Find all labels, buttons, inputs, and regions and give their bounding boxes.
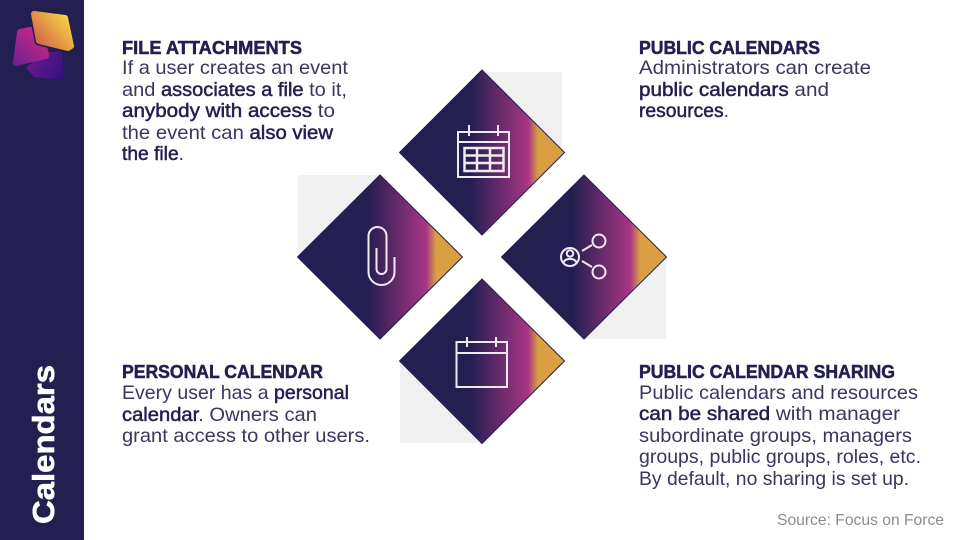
logo <box>16 14 71 78</box>
text block: public calendar sharing: Public calendars and resources <box>639 382 918 404</box>
diamond: file attachments <box>298 175 462 339</box>
decorative square: right <box>584 257 666 339</box>
text block: public calendar sharing: By default, no sharing is set up. <box>639 468 909 490</box>
text block: file attachments: If a user creates an event <box>122 57 349 79</box>
text block: public calendars <box>639 38 871 122</box>
text block: public calendar sharing <box>639 362 921 490</box>
sidebar title: Calendars <box>26 365 61 524</box>
diamond: public calendar sharing <box>502 175 666 339</box>
text block: file attachments: and associates a file to it, <box>122 79 347 101</box>
decorative square: top <box>482 72 562 153</box>
text block: personal calendar <box>122 362 370 447</box>
text block: file attachments: the file. <box>122 143 184 165</box>
source note: Source: Focus on Force <box>777 512 944 529</box>
text block: personal calendar: calendar. Owners can <box>122 404 317 426</box>
diamond: personal calendar <box>400 279 564 444</box>
sidebar <box>0 0 84 540</box>
text block: file attachments: FILE ATTACHMENTS <box>122 38 302 58</box>
text block: public calendar sharing: groups, public groups, roles, etc. <box>639 446 921 468</box>
icon: blank calendar <box>456 337 507 387</box>
text block: public calendars: Administrators can create <box>639 57 871 79</box>
text block: personal calendar: grant access to other users. <box>122 425 370 447</box>
icon: paperclip <box>368 227 394 285</box>
text block: file attachments <box>122 38 349 165</box>
decorative square: bottom <box>400 361 482 443</box>
text block: file attachments: anybody with access to <box>122 100 335 122</box>
text block: public calendars: resources. <box>639 100 729 122</box>
text block: public calendars: PUBLIC CALENDARS <box>639 38 820 58</box>
decorative square: left <box>298 175 380 257</box>
icon: calendar with table <box>458 125 509 177</box>
text block: public calendars: public calendars and <box>639 79 829 101</box>
text block: personal calendar: Every user has a personal <box>122 382 349 404</box>
icon: shared user <box>561 234 606 278</box>
text block: public calendar sharing: can be shared with manager <box>639 403 901 425</box>
text block: file attachments: the event can also view <box>122 122 334 144</box>
text block: personal calendar: PERSONAL CALENDAR <box>122 362 323 382</box>
diamond: public calendars <box>400 70 564 235</box>
text block: public calendar sharing: PUBLIC CALENDAR SHARING <box>639 362 895 382</box>
text block: public calendar sharing: subordinate groups, managers <box>639 425 912 447</box>
